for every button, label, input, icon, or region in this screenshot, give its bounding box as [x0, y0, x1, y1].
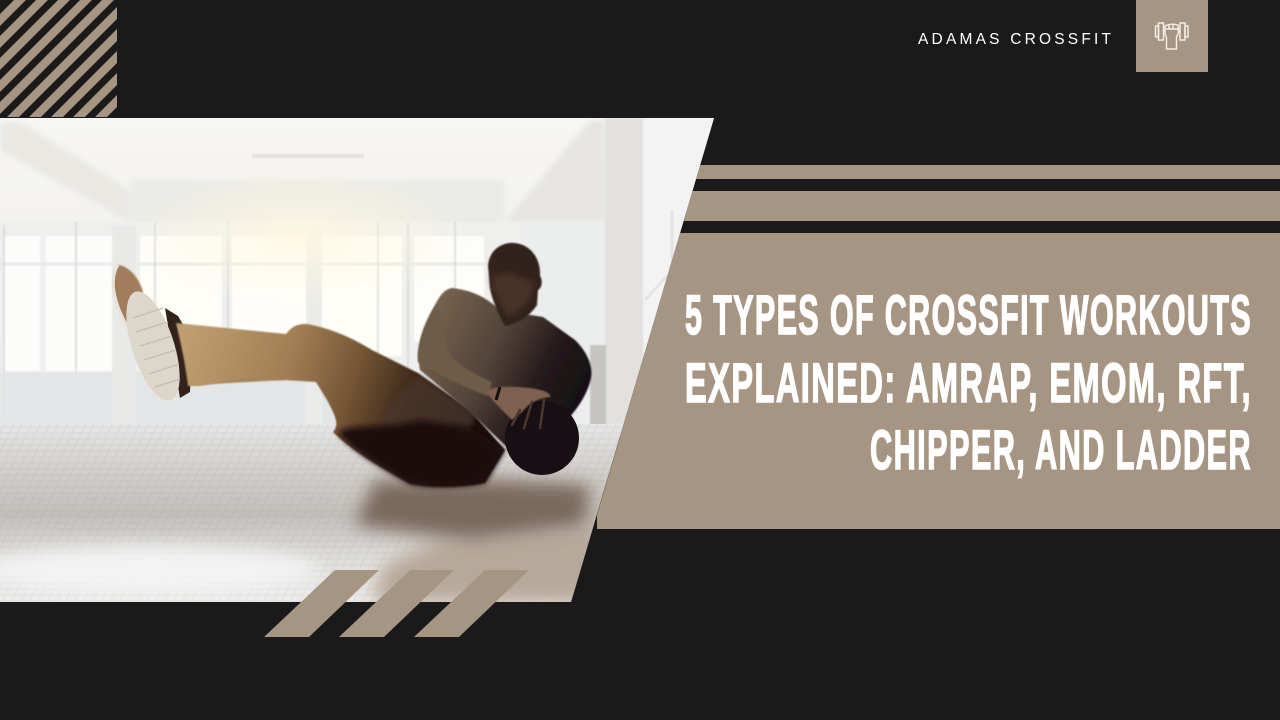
camo shorts detail	[380, 376, 475, 428]
floor	[0, 424, 640, 604]
shorts dark base	[338, 420, 505, 487]
neck and head	[488, 243, 542, 326]
rear shoe sole rim	[113, 265, 127, 326]
title	[685, 283, 1252, 481]
front shoe sole	[126, 291, 180, 400]
sole tread	[133, 308, 180, 387]
front shoe upper	[165, 308, 192, 398]
medicine ball	[505, 401, 579, 475]
tan stripe two	[684, 191, 1280, 221]
windows	[0, 222, 530, 427]
legs and shorts	[176, 323, 505, 487]
wrist band	[496, 387, 500, 400]
bottom slanted bars	[264, 570, 529, 637]
concrete column and right wall	[520, 118, 718, 438]
warm sun glow	[198, 198, 409, 280]
athlete figure	[113, 243, 591, 487]
icon: fist holding dumbbell	[1156, 23, 1188, 49]
rear shoe	[113, 265, 143, 326]
arm	[418, 305, 492, 396]
fingers	[512, 400, 544, 428]
hand on ball	[486, 387, 550, 420]
tan stripe one	[696, 165, 1280, 179]
brand name: ADAMAS CROSSFIT	[918, 31, 1112, 48]
face highlight	[491, 272, 534, 316]
torso	[419, 288, 591, 450]
diagonal stripes pattern	[0, 0, 117, 117]
rear leg	[204, 377, 286, 385]
photo: athlete doing a medicine ball twist	[0, 118, 720, 604]
gym ceiling and wall	[0, 118, 720, 428]
title panel	[597, 233, 1280, 529]
logo box	[1136, 0, 1208, 72]
